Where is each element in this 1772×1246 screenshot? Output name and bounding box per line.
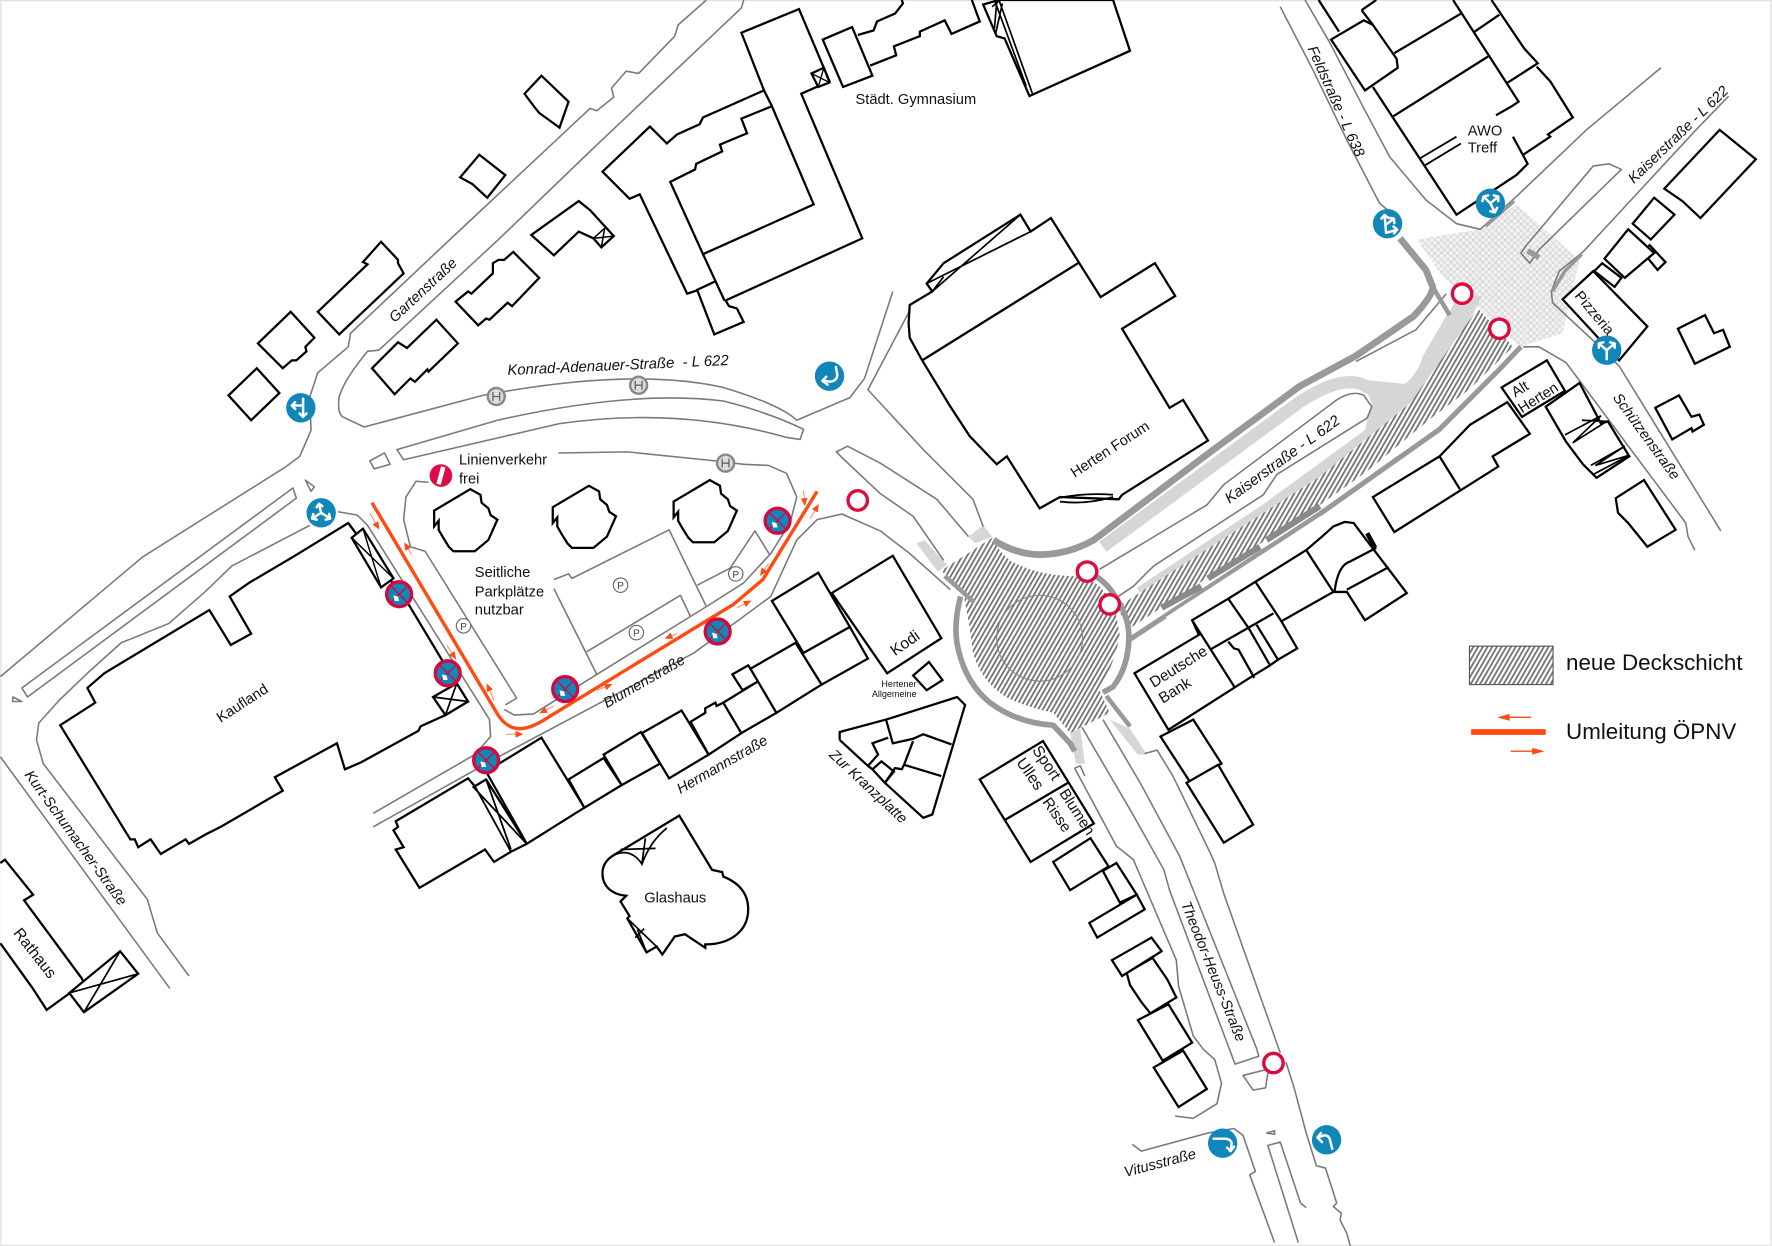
street name labels: Kaiserstraße - L 622	[1625, 83, 1732, 187]
cobbled junction surface	[1417, 204, 1580, 347]
building name labels: Risse	[1039, 795, 1074, 836]
note: side parking usable: Parkplätze	[475, 584, 544, 600]
building block: AWO Treff	[1319, 0, 1573, 215]
buildings: Theodor-Heuss-Straße row	[1053, 838, 1207, 1107]
building: Glashaus	[602, 816, 748, 955]
blue direction sign: Schützenstraße	[1592, 336, 1621, 365]
red circle signs: road closed	[848, 284, 1509, 1073]
buildings: Hermannstraße row	[393, 556, 942, 888]
building: Zur Kranzplatte block	[840, 697, 965, 818]
no-entry sign	[427, 462, 455, 489]
building: Herten Forum	[909, 215, 1208, 508]
street name labels: Hermannstraße	[674, 733, 771, 798]
buildings: Kaiserstraße south incl. Deutsche Bank	[1135, 522, 1407, 843]
building: Gymnasium	[602, 0, 1130, 334]
building name labels: Deutsche	[1147, 643, 1210, 691]
street name labels: Konrad-Adenauer-Straße - L 622	[507, 353, 730, 379]
light grey carriageway bands on Kaiserstraße	[917, 296, 1482, 764]
legend: public transport diversion: Umleitung ÖPNV	[1566, 719, 1736, 744]
street name labels: Gartenstraße	[386, 255, 461, 326]
legend: new surface	[1469, 646, 1743, 685]
building name labels: Blumen	[1055, 786, 1098, 839]
street name labels: Schützenstraße	[1609, 391, 1682, 483]
note: buses exempt	[459, 452, 547, 487]
bus stop signs	[488, 377, 734, 472]
diversion route: public transport	[370, 490, 818, 734]
building name labels: Pizzeria	[1571, 288, 1617, 339]
buildings: Gartenstraße houses	[229, 76, 614, 420]
street name labels: Kaiserstraße - L 622	[1222, 412, 1344, 507]
blue direction sign: Kaiserstraße north	[1476, 189, 1505, 218]
building: Kaufland	[60, 523, 468, 854]
blue direction sign: Feldstraße	[1373, 209, 1402, 238]
note: buses exempt: frei	[459, 471, 479, 487]
building name labels: Ulles	[1013, 755, 1047, 794]
street name labels: Kurt-Schumacher-Straße	[21, 768, 129, 909]
building name labels: Rathaus	[10, 925, 59, 982]
blue direction sign: Kaufland corner	[306, 498, 336, 528]
building name labels: Kodi	[888, 628, 923, 660]
note: side parking usable	[475, 565, 544, 619]
building name labels: Glashaus	[644, 891, 706, 907]
street name labels: Blumenstraße	[601, 652, 688, 712]
new surface layer: Kaiserstraße band	[1116, 308, 1513, 628]
buildings: Alt Herten row	[1373, 360, 1629, 532]
building name labels: Alt	[1509, 378, 1532, 401]
parking symbols	[456, 567, 743, 640]
street name labels: Feldstraße - L 638	[1304, 44, 1367, 160]
building name labels: Herten	[1516, 380, 1561, 417]
note: buses exempt: Linienverkehr	[459, 452, 547, 468]
new surface layer: roundabout	[941, 538, 1120, 733]
building: Rathaus	[0, 860, 138, 1012]
building: Sport Ulles / Blumen Risse	[980, 741, 1094, 862]
note: side parking usable: nutzbar	[475, 603, 524, 619]
dark grey kerbs and parking strips	[945, 201, 1582, 751]
buildings: north-east	[1563, 130, 1756, 547]
building name labels: AWO	[1468, 124, 1502, 140]
building name labels: Allgemeine	[872, 689, 917, 699]
building name labels: Bank	[1156, 674, 1195, 707]
blue direction sign: Gartenstraße	[286, 393, 316, 422]
building name labels: Hertener	[881, 679, 917, 689]
street name labels: Zur Kranzplatte	[825, 746, 910, 827]
building name labels: Kaufland	[214, 681, 271, 726]
street name labels: Theodor-Heuss-Straße	[1177, 899, 1248, 1044]
building name labels: Herten Forum	[1068, 418, 1153, 481]
no-parking signs	[387, 508, 790, 773]
blue direction sign: Vitusstraße	[1208, 1129, 1237, 1158]
legend: new surface: neue Deckschicht	[1566, 650, 1743, 675]
note: side parking usable: Seitliche	[475, 565, 530, 581]
blue direction sign: Konrad-Adenauer-Straße	[815, 361, 844, 391]
building name labels: Sport	[1028, 743, 1064, 784]
building name labels: Städt. Gymnasium	[855, 92, 976, 108]
building name labels: Treff	[1468, 141, 1498, 157]
street name labels: Vitusstraße	[1122, 1146, 1198, 1181]
blue direction sign: Theodor-Heuss-Straße south	[1312, 1125, 1341, 1154]
building name labels	[10, 92, 1617, 982]
three tower buildings	[434, 480, 737, 551]
legend: public transport diversion	[1471, 714, 1736, 755]
